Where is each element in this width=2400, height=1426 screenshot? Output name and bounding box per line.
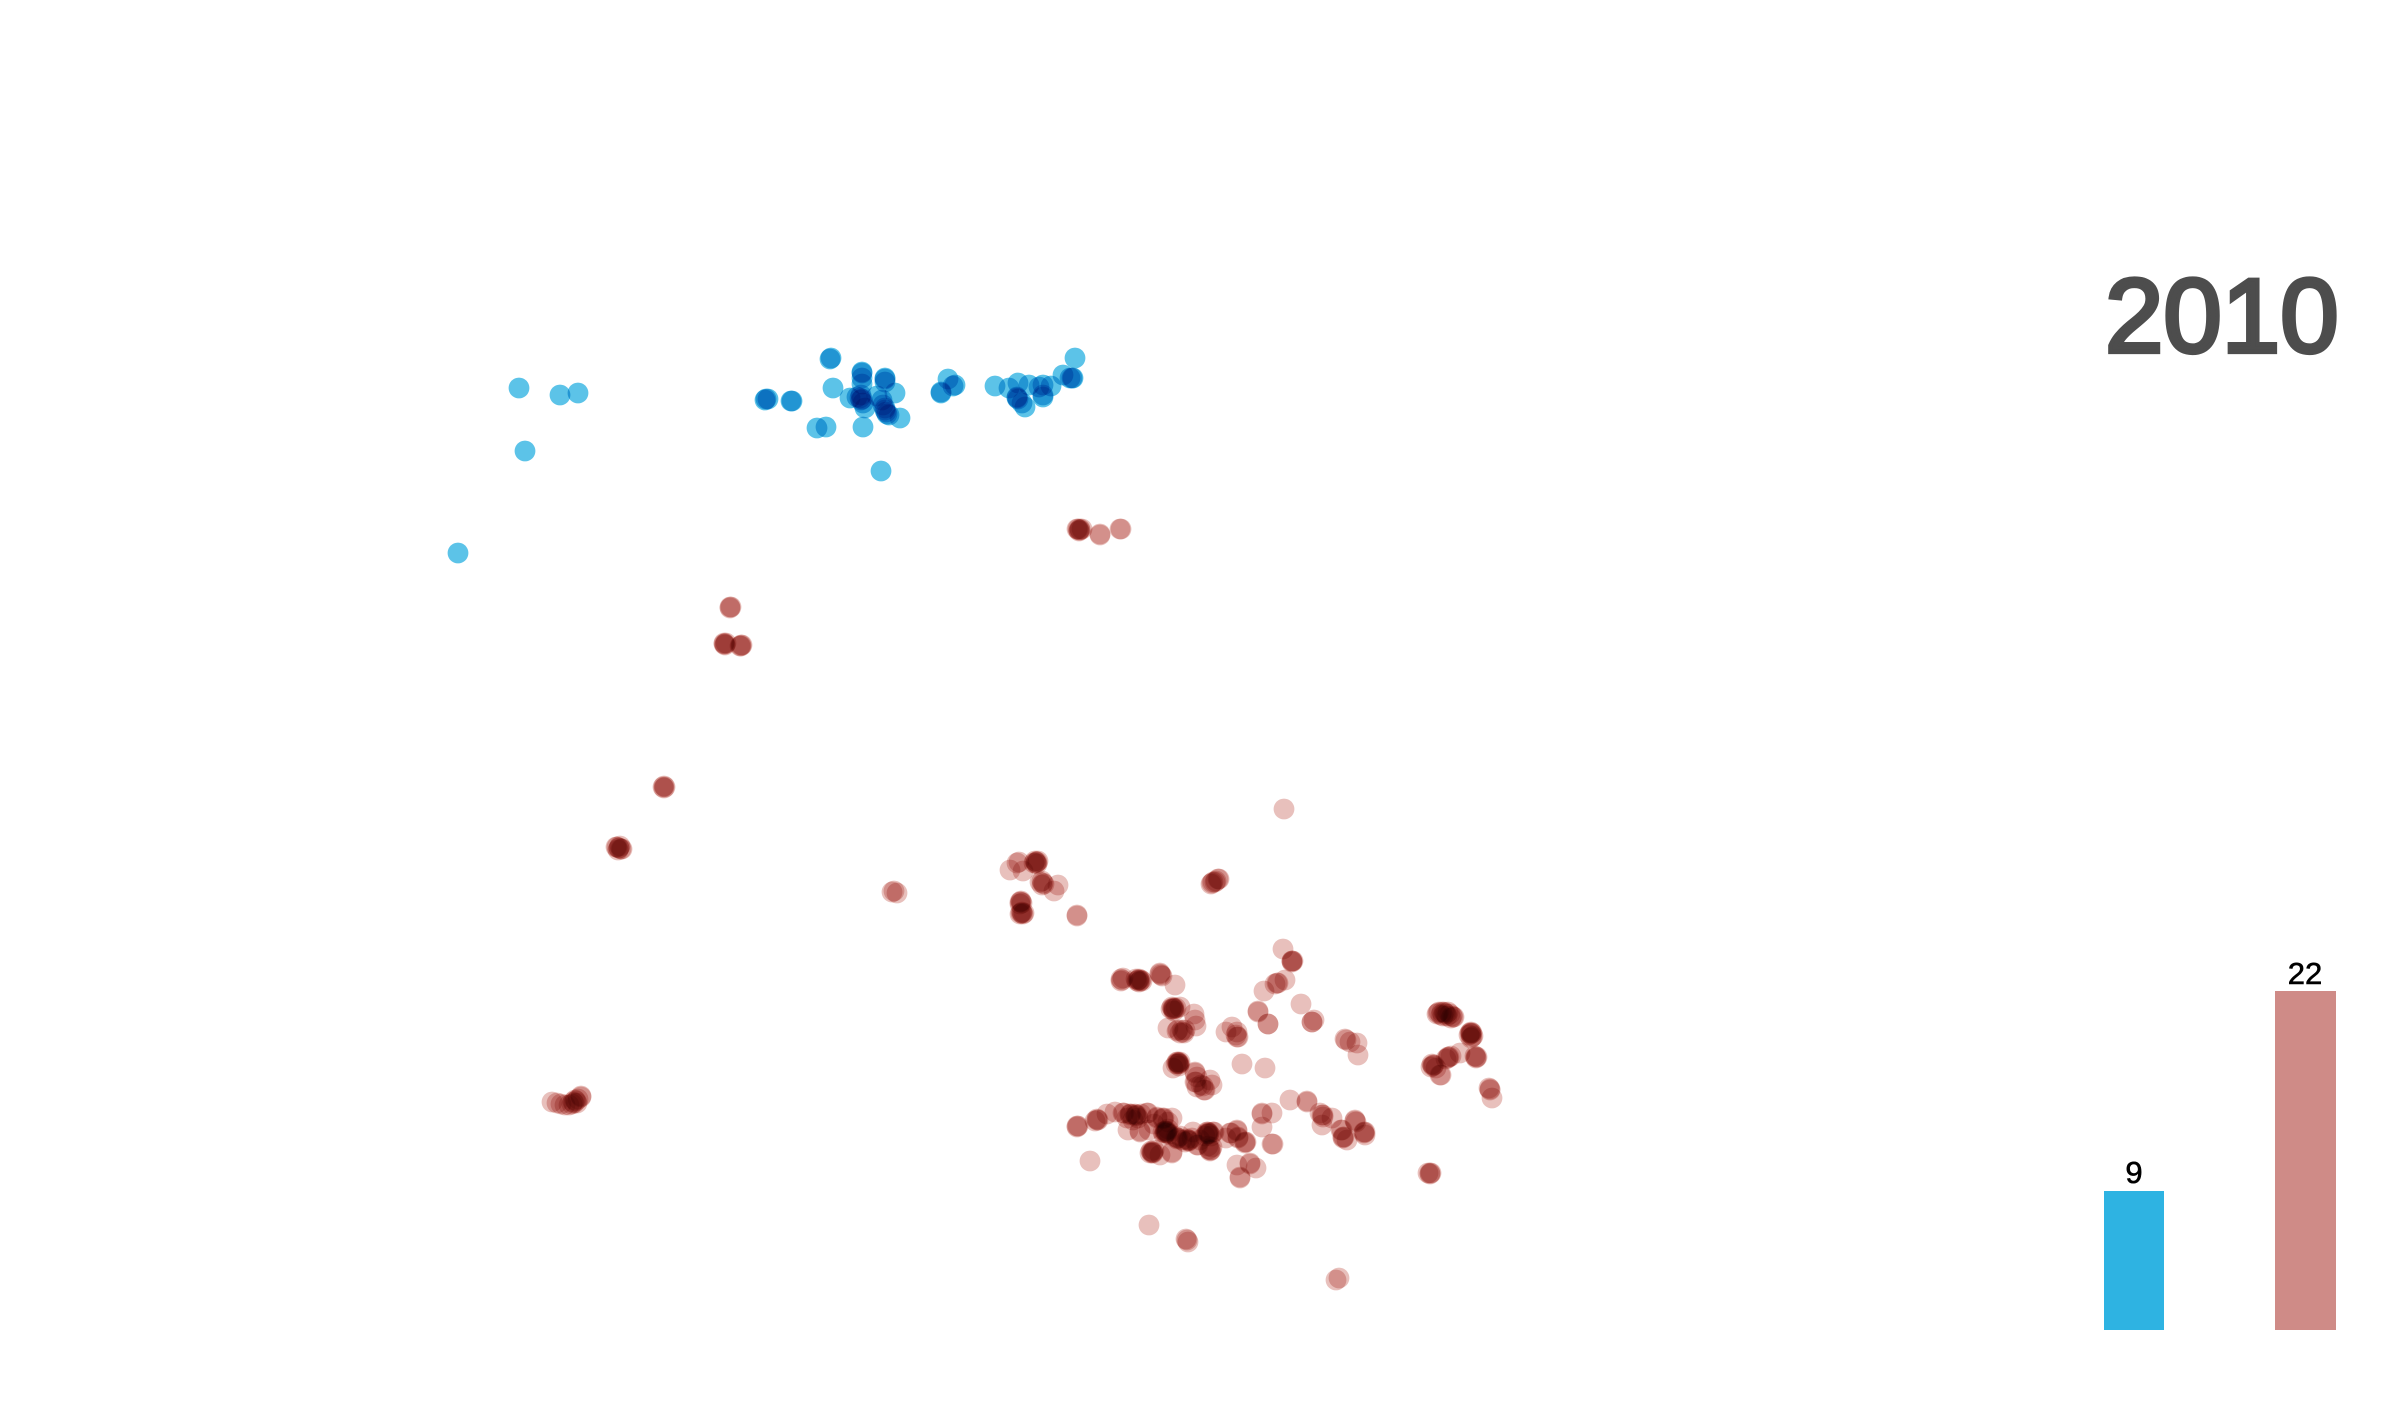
- blue cluster: central points: [755, 348, 910, 481]
- red cluster: middle points: [1000, 799, 1294, 926]
- blue cluster: isolated west points: [448, 378, 588, 563]
- year label: 2010: [2105, 258, 2339, 375]
- blue scatter points: [448, 348, 1085, 563]
- red bar value: 22: [2288, 956, 2322, 991]
- red cluster: eastern points: [1421, 1002, 1502, 1108]
- red bar: [2275, 991, 2336, 1330]
- blue bar value: 9: [2125, 1155, 2143, 1190]
- blue cluster: eastern points: [931, 348, 1085, 417]
- red cluster: north and west outliers: [542, 519, 1131, 1115]
- red cluster: dense south-central points: [1067, 939, 1441, 1290]
- bar chart: counts: [2104, 956, 2336, 1330]
- red scatter points: [542, 519, 1502, 1290]
- blue bar: [2104, 1191, 2164, 1330]
